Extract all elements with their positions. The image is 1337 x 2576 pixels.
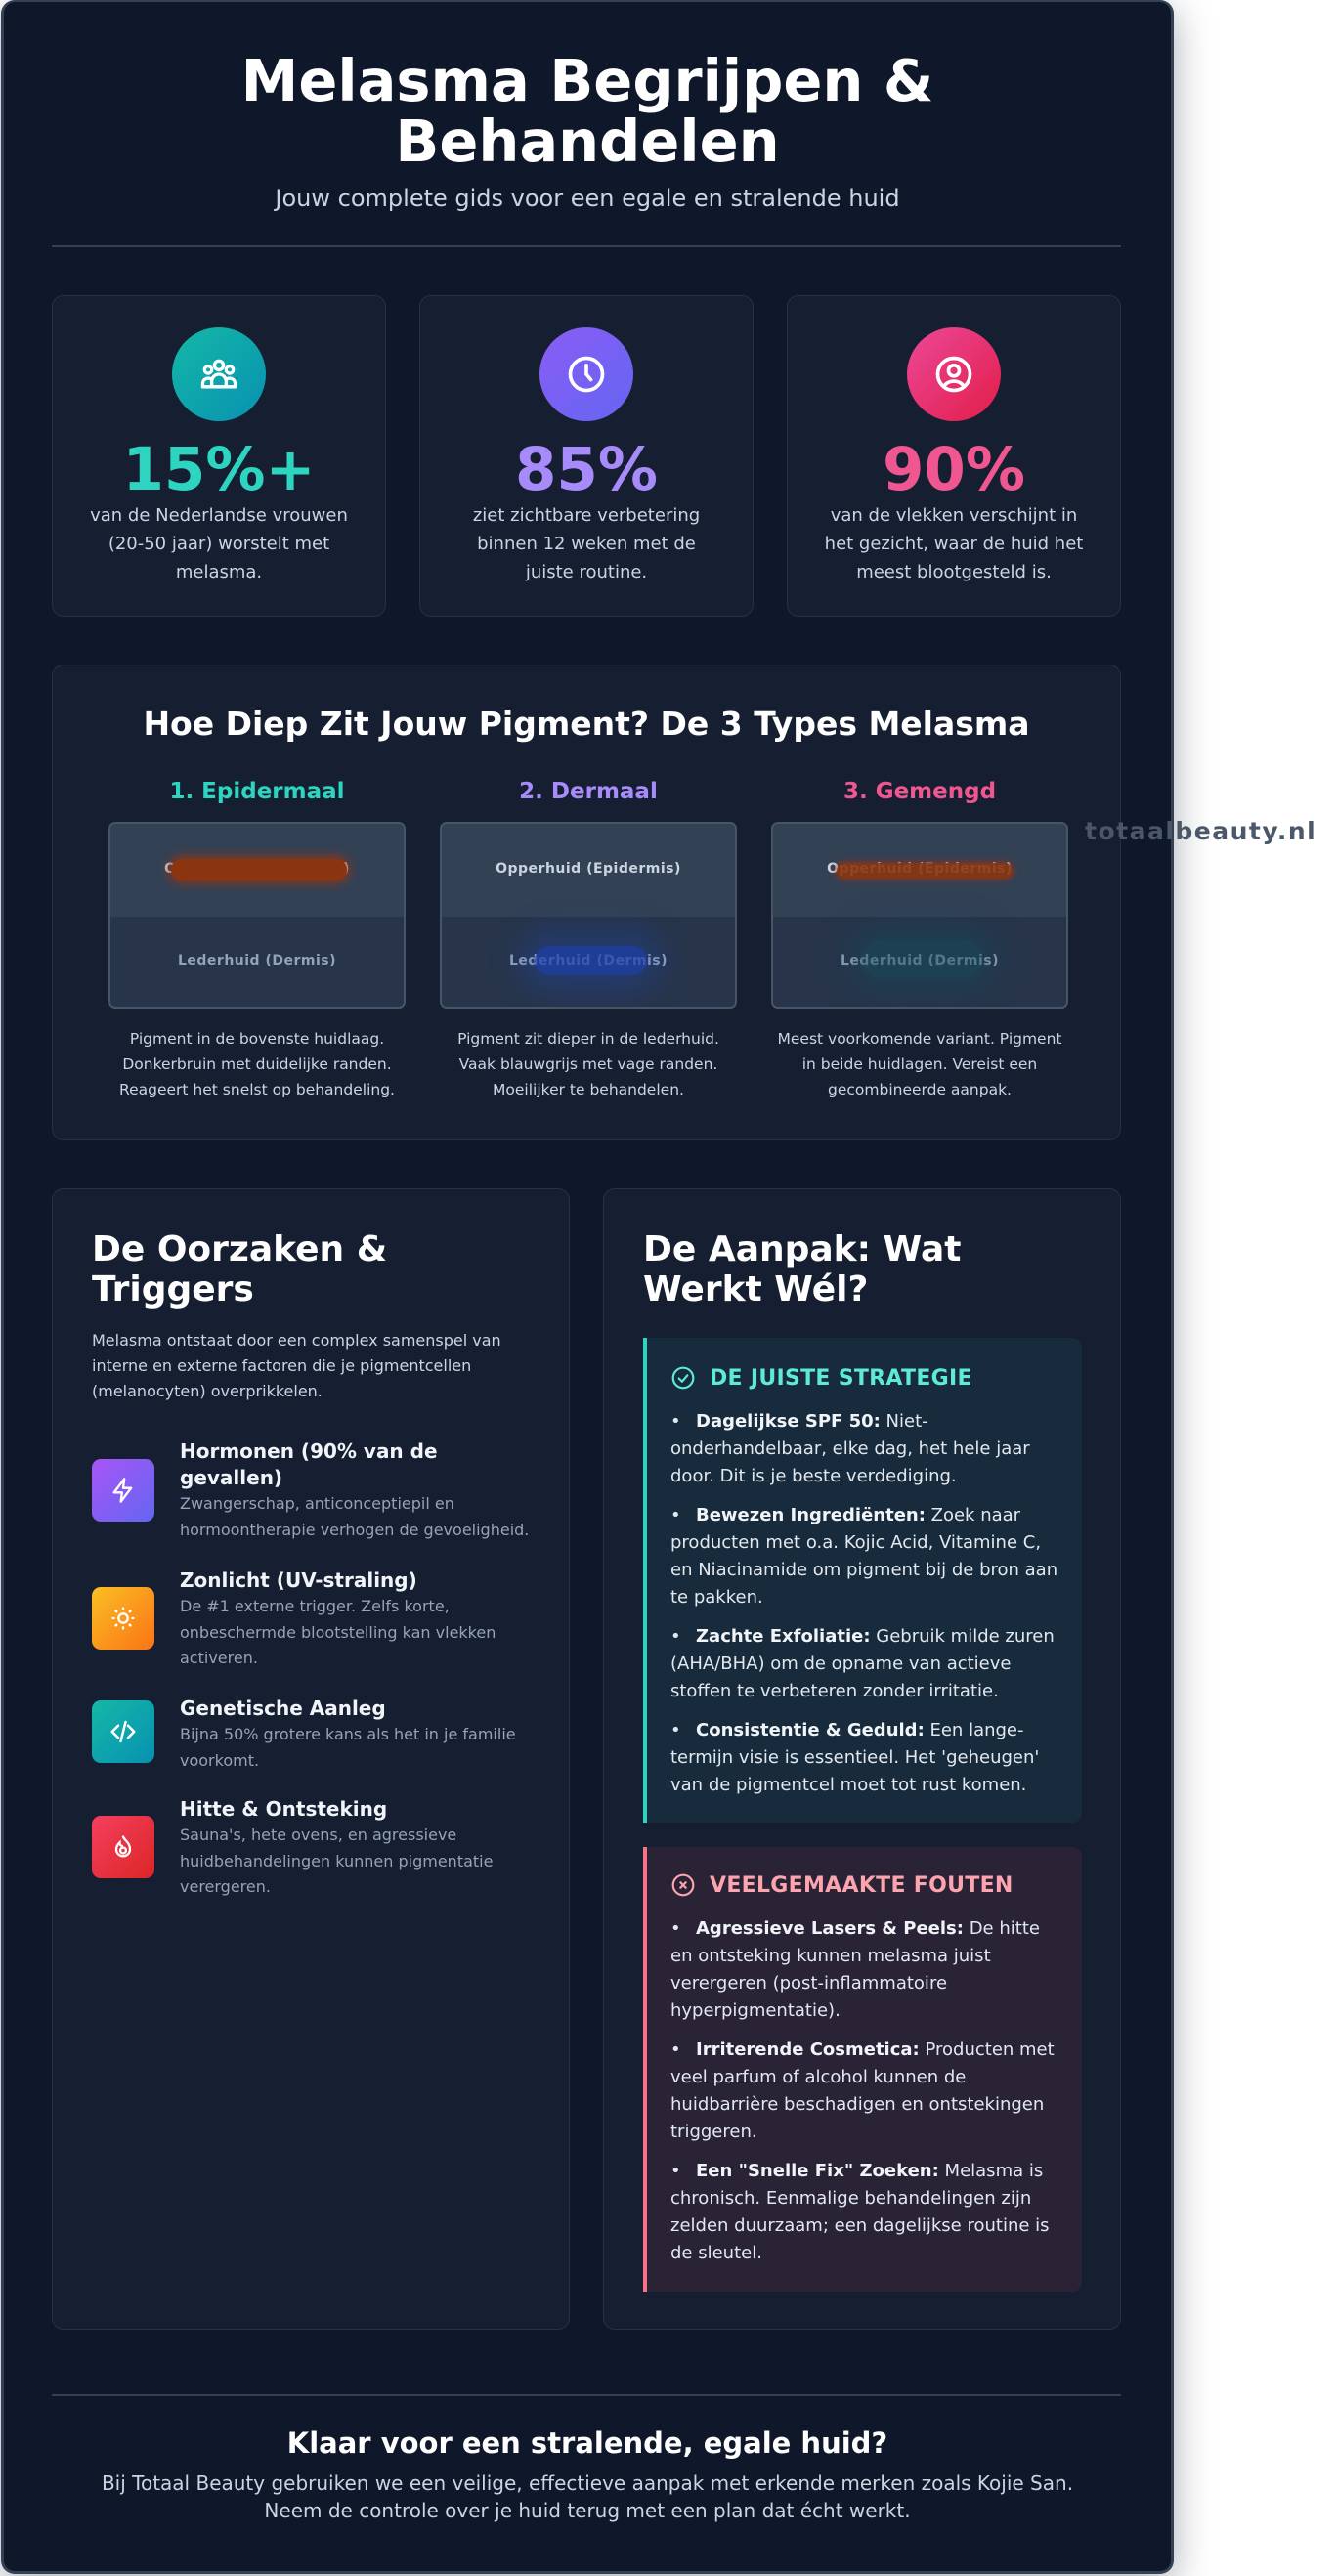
heading: Hoe Diep Zit Jouw Pigment? De 3 Types Melasma [143, 705, 1030, 743]
item: hitte: Hitte & Ontsteking [180, 1797, 387, 1821]
callout: veelgemaakte fouten: Een "Snelle Fix" Zoeken: Melasma is chronisch. Eenmalige behandelingen zijn zelden duurzaam; een dagelijkse routine is de sleutel. [670, 2161, 1050, 2263]
item: genetica: Bijna 50% grotere kans als het in je familie voorkomt. [180, 1725, 516, 1769]
item: zonlicht: Zonlicht (UV-straling) [180, 1568, 417, 1592]
callout: veelgemaakte fouten: en ontsteking kunnen melasma juist [670, 1946, 991, 1966]
callout: veelgemaakte fouten: hyperpigmentatie). [670, 2000, 841, 2021]
diagram 1: Lederhuid (Dermis) [178, 953, 336, 968]
diagram 3: Lederhuid (Dermis) [841, 953, 999, 968]
icon + header: VEELGEMAAKTE FOUTEN [710, 1872, 1014, 1898]
type 1 title: 1. Epidermaal [169, 779, 345, 804]
diagram 2: Lederhuid (Dermis) [509, 953, 668, 968]
description: het gezicht, waar de huid het [825, 534, 1083, 554]
heading: De Oorzaken & [92, 1229, 387, 1269]
callout: veelgemaakte fouten [643, 1847, 1082, 2292]
stat card: 90% [787, 295, 1121, 617]
item: hormonen [92, 1439, 529, 1538]
diagram 1 [108, 822, 406, 1009]
icon + header: DE JUISTE STRATEGIE [710, 1366, 972, 1390]
title [241, 47, 933, 175]
description [825, 505, 1083, 582]
icon: clock [539, 327, 633, 421]
item: hormonen: Hormonen (90% van de gevallen) [180, 1439, 438, 1489]
item: hitte [92, 1797, 493, 1896]
diagram 3: Opperhuid (Epidermis) [827, 861, 1013, 877]
callout: juiste strategie [643, 1338, 1082, 1823]
item: genetica [92, 1696, 516, 1769]
type 1 text: Pigment in de bovenste huidlaag. Donkerbruin met duidelijke randen. Reageert het snelst op behandeling. [119, 1030, 395, 1098]
diagram 3 [771, 822, 1068, 1009]
number: 90% [883, 435, 1025, 504]
item: zonlicht [92, 1568, 496, 1667]
item: genetica: Genetische Aanleg [180, 1696, 386, 1720]
footer text [102, 2471, 1073, 2522]
item: zonlicht: De #1 externe trigger. Zelfs korte, onbeschermde blootstelling kan vlekken activeren. [180, 1597, 496, 1667]
icon: face [907, 327, 1001, 421]
title: Behandelen [395, 107, 780, 175]
diagram 2: Opperhuid (Epidermis) [496, 861, 681, 877]
item: hitte: Sauna's, hete ovens, en agressieve huidbehandelingen kunnen pigmentatie verergeren. [180, 1825, 493, 1896]
heading [92, 1229, 387, 1309]
heading: De Aanpak: Wat [643, 1229, 961, 1269]
footer text: Bij Totaal Beauty gebruiken we een veilige, effectieve aanpak met erkende merken zoals Kojie San. [102, 2471, 1073, 2495]
diagram 2 [440, 822, 737, 1009]
footer heading: Klaar voor een stralende, egale huid? [287, 2426, 887, 2460]
footer text: Neem de controle over je huid terug met een plan dat écht werkt. [264, 2499, 911, 2522]
heading [643, 1229, 961, 1309]
type 2 text: Pigment zit dieper in de lederhuid. Vaak blauwgrijs met vage randen. Moeilijker te behandelen. [457, 1030, 719, 1098]
item: hormonen: Zwangerschap, anticonceptiepil en hormoontherapie verhogen de gevoeligheid. [180, 1494, 529, 1538]
watermark: totaalbeauty.nl [1085, 817, 1316, 845]
callout: juiste strategie: Zachte Exfoliatie: Gebruik milde zuren (AHA/BHA) om de opname van actieve stoffen te verbeteren zonder irritatie. [670, 1626, 1055, 1701]
panel: aanpak [603, 1188, 1121, 2330]
description: van de Nederlandse vrouwen (20-50 jaar) worstelt met melasma. [90, 505, 348, 582]
stat card: 15%+ [52, 295, 386, 617]
intro text: Melasma ontstaat door een complex samenspel van interne en externe factoren die je pigmentcellen (melanocyten) overprikkelen. [92, 1331, 501, 1400]
callout: juiste strategie: Consistentie & Geduld: Een lange-termijn visie is essentieel. Het 'geheugen' van de pigmentcel moet tot rust komen. [670, 1720, 1039, 1795]
heading: Werkt Wél? [643, 1269, 868, 1309]
callout: veelgemaakte fouten: Irriterende Cosmetica: Producten met veel parfum of alcohol kunnen de huidbarrière beschadigen en ontstekingen triggeren. [670, 2039, 1055, 2142]
number: 85% [515, 435, 658, 504]
type 2 title: 2. Dermaal [519, 779, 658, 804]
number: 15%+ [122, 435, 316, 504]
type 3 text: Meest voorkomende variant. Pigment in beide huidlagen. Vereist een gecombineerde aanpak. [778, 1030, 1061, 1098]
callout: veelgemaakte fouten: Agressieve Lasers & Peels: De hitte [696, 1918, 1040, 1939]
panel: types melasma [52, 665, 1121, 1140]
title: Melasma Begrijpen & [241, 47, 933, 114]
panel: causes [52, 1188, 570, 2330]
description: van de vlekken verschijnt in [831, 505, 1077, 526]
callout: juiste strategie: Bewezen Ingrediënten: Zoek naar producten met o.a. Kojic Acid, Vitamine C, en Niacinamide om pigment bij de bron aan te pakken. [670, 1505, 1057, 1608]
type 3 title: 3. Gemengd [843, 779, 996, 804]
heading: Triggers [92, 1269, 254, 1309]
icon: users [172, 327, 266, 421]
callout: veelgemaakte fouten: verergeren (post-inflammatoire [670, 1973, 947, 1994]
description: meest blootgesteld is. [856, 562, 1052, 582]
callout: juiste strategie: Dagelijkse SPF 50: Niet-onderhandelbaar, elke dag, het hele jaar door. Dit is je beste verdediging. [670, 1411, 1030, 1486]
stat card: 85% [419, 295, 754, 617]
diagram 1: Opperhuid (Epidermis) [164, 861, 350, 877]
subtitle: Jouw complete gids voor een egale en stralende huid [275, 185, 900, 212]
description: ziet zichtbare verbetering binnen 12 weken met de juiste routine. [473, 505, 700, 582]
